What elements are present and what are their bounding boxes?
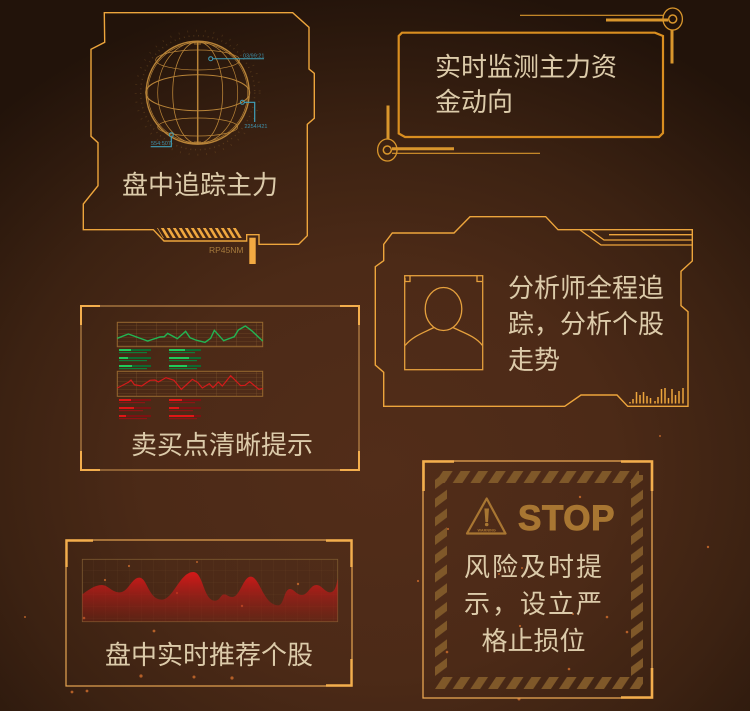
panel: buy and sell signals [81, 306, 359, 470]
icon: warning triangle: WARNING [478, 528, 496, 532]
connector: top right [520, 8, 682, 64]
particles [24, 435, 709, 700]
text block [508, 273, 664, 375]
panel: recommended stocks [66, 540, 352, 686]
text block: 格止损位 [481, 626, 586, 656]
panel frame [81, 306, 359, 470]
panel frame [375, 217, 692, 406]
model label: RP45NM [209, 245, 243, 255]
text block: 金动向 [435, 87, 513, 117]
stop heading: STOP [518, 499, 615, 538]
heading: 卖买点清晰提示 [131, 430, 313, 460]
panel frame [83, 13, 314, 244]
chart: red line [117, 371, 263, 396]
icon: analyst portrait [405, 276, 483, 370]
connector: bottom left [378, 106, 540, 161]
green indicator bars [119, 349, 201, 369]
corner brackets [66, 540, 352, 686]
hazard stripe border [435, 471, 643, 689]
text block: 踪，分析个股 [508, 309, 664, 339]
icon: warning triangle [467, 498, 506, 534]
heading: 盘中实时推荐个股 [105, 640, 313, 670]
circuit lines [580, 230, 692, 245]
panel: intraday tracking of main force [83, 13, 314, 264]
text block: 示，设立严 [464, 589, 604, 619]
icon: wireframe globe [136, 31, 260, 155]
text block [435, 52, 617, 117]
panel frame [66, 540, 352, 686]
panel frame [423, 461, 652, 698]
chart: red area [82, 559, 338, 622]
corner brackets [81, 306, 359, 470]
text block: 分析师全程追 [508, 273, 664, 303]
panel: analyst tracking [375, 217, 692, 406]
text block [464, 552, 604, 656]
tab bar [249, 238, 256, 264]
heading: 盘中追踪主力 [122, 170, 278, 200]
corner brackets [424, 462, 652, 698]
text block: 走势 [508, 345, 560, 375]
panel: risk warning [423, 461, 652, 698]
panel frame [399, 33, 663, 137]
globe callouts: 03/99:21 [243, 54, 264, 60]
globe callouts: 2254/421 [244, 124, 267, 130]
hatched strip [157, 228, 244, 238]
text block: 实时监测主力资 [435, 52, 617, 82]
globe callouts: 554:507 [151, 141, 171, 147]
panel: real-time monitoring [378, 8, 682, 161]
chart: green line [117, 322, 263, 347]
text block: 风险及时提 [464, 552, 604, 582]
globe callouts [151, 54, 267, 147]
mini bar chart [630, 388, 683, 404]
red indicator bars [119, 399, 201, 419]
